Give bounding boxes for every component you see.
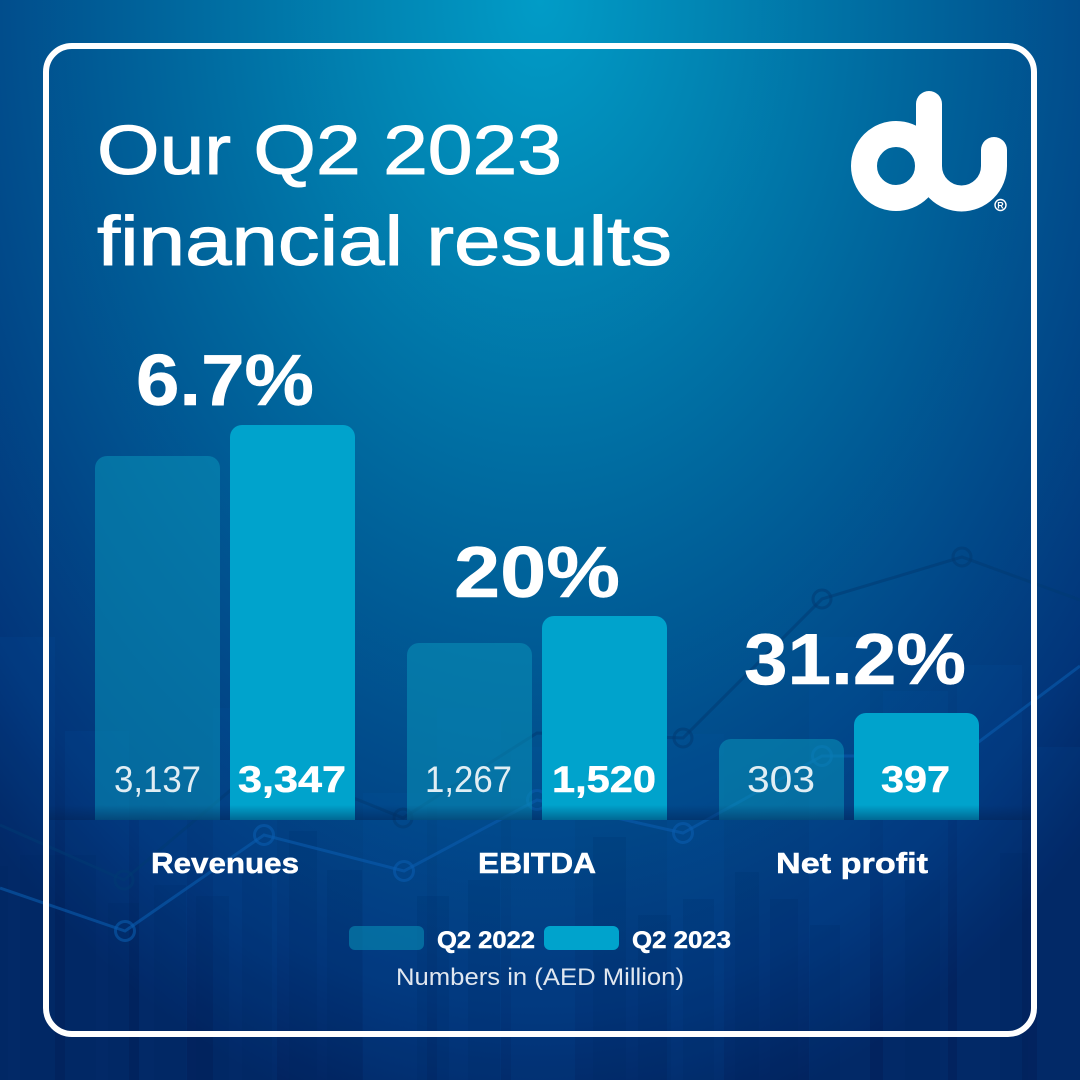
bar: Net profit Q2 2022 xyxy=(719,739,844,820)
baseline shadow xyxy=(49,805,1031,820)
bar: Revenues Q2 2022 xyxy=(95,456,220,820)
value: Revenues 2023: 3,347 xyxy=(238,759,346,800)
legend label: Q2 2022: Q2 2022 xyxy=(437,927,535,954)
value: EBITDA 2023: 1,520 xyxy=(552,759,656,800)
value: EBITDA 2022: 1,267 xyxy=(425,759,512,800)
icon: du logo xyxy=(864,104,1006,210)
legend swatch: Q2 2023 xyxy=(544,926,619,950)
growth: Revenues: 6.7% xyxy=(136,341,314,421)
background line chart: dark line xyxy=(0,548,1080,889)
growth: EBITDA: 20% xyxy=(454,533,620,613)
legend swatch: Q2 2022 xyxy=(349,926,424,950)
bar: EBITDA Q2 2022 xyxy=(407,643,532,820)
bar: EBITDA Q2 2023 xyxy=(542,616,667,820)
bar: Net profit Q2 2023 xyxy=(854,713,979,820)
value: Net profit 2023: 397 xyxy=(881,759,950,800)
background line chart: blue line xyxy=(0,666,1080,940)
title: financial results xyxy=(97,202,672,280)
bar: Revenues Q2 2023 xyxy=(230,425,355,820)
chart: EBITDA xyxy=(407,533,667,820)
chart: Revenues xyxy=(95,341,355,820)
legend xyxy=(349,926,731,991)
growth: Net profit: 31.2% xyxy=(744,620,966,700)
category label: Net profit: Net profit xyxy=(776,848,928,880)
title xyxy=(97,111,672,280)
value: Revenues 2022: 3,137 xyxy=(114,759,201,800)
title: Our Q2 2023 xyxy=(97,111,562,189)
legend label: Q2 2023: Q2 2023 xyxy=(632,927,731,954)
category label: EBITDA: EBITDA xyxy=(478,848,596,880)
background skyline bars xyxy=(0,637,1080,1080)
value: Net profit 2022: 303 xyxy=(747,759,815,800)
chart: Net profit xyxy=(719,620,979,820)
category label: Revenues: Revenues xyxy=(151,848,299,880)
unit note: Numbers in (AED Million) xyxy=(396,964,684,991)
icon: du logo: R xyxy=(997,200,1004,210)
